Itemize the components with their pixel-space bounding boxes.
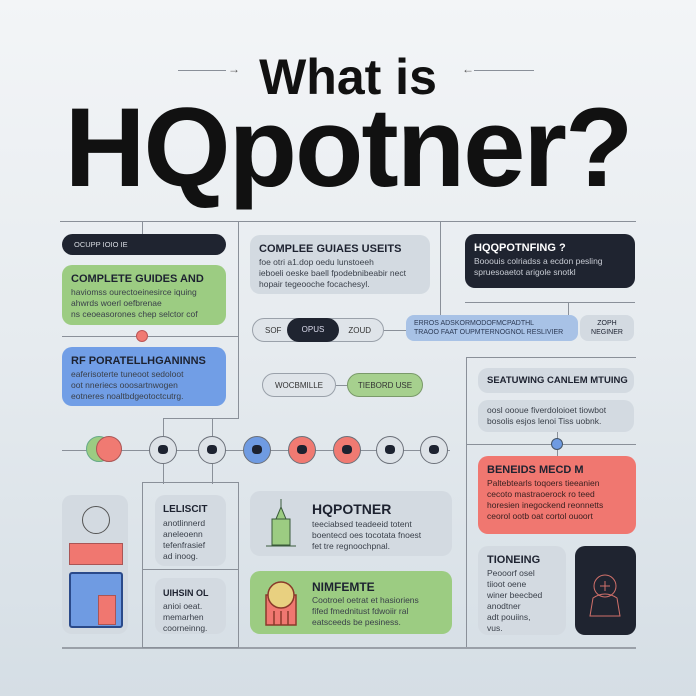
dark pill header: OCUPP IOIO IE	[74, 240, 128, 249]
panel: nimfemte	[250, 571, 452, 634]
panel: tioneing: TIONEING	[487, 554, 540, 566]
panel: leliscit	[155, 495, 226, 566]
gray tag	[580, 315, 634, 341]
panel: gray guide	[250, 235, 430, 294]
panel: tioneing	[478, 546, 566, 635]
red dot	[136, 330, 148, 342]
panel: nimfemte: NIMFEMTE	[312, 580, 375, 594]
panel: red benefits: horesien inegockend reonnetts	[487, 500, 603, 510]
gray tag: ZOPH	[597, 320, 617, 327]
panel: uhsin	[155, 578, 226, 634]
dark pill header	[62, 234, 226, 255]
icon row circles	[86, 436, 448, 464]
panel: green guide: haviomss ourectoeinesirce iquing	[71, 287, 197, 297]
panel: nimfemte: Cootroel oetrat et hasioriens	[312, 595, 419, 605]
panel: hqpotner: boentecd oes tocotata fnoest	[312, 530, 421, 540]
panel: blue: oot nneriecs ooosartnwogen	[71, 380, 178, 390]
panel: tioneing: adt pouiins,	[487, 612, 530, 622]
panel: red benefits: BENEIDS MECD M	[487, 464, 584, 476]
icon panel: dark person	[575, 546, 636, 635]
gray text box: bosolis esjos lenoi Tiss uobnk.	[487, 416, 601, 426]
panel: tioneing: tiioot oene	[487, 579, 526, 589]
panel: leliscit: aneleoenn	[163, 529, 203, 539]
pill green: TIEBORD USE	[358, 380, 412, 390]
pill left: WOCBMILLE	[275, 380, 323, 390]
heading pill: SEATUWING CANLEM MTUING	[487, 375, 628, 386]
pill toggle	[252, 318, 384, 342]
panel: nimfemte: fifed fmednitust fdwoiir ral	[312, 606, 408, 616]
blue callout: ERROS ADSKORMODOFMCPADTHL	[414, 320, 534, 327]
panel: dark question: spruesoaetot arigole snotkl	[474, 267, 576, 277]
panel: gray guide: foe otri a1.dop oedu lunstoeeh	[259, 257, 374, 267]
panel: green guide: COMPLETE GUIDES AND	[71, 273, 204, 285]
panel: red benefits: ceorol ootb oat cortol ouoort	[487, 511, 593, 521]
gray text box: oosl oooue fiverdoloioet tiowbot	[487, 405, 606, 415]
panel: tioneing: Peooorf osel	[487, 568, 535, 578]
panel: tioneing: anodtner	[487, 601, 521, 611]
panel: dark question: HQQPOTNFING ?	[474, 242, 566, 254]
gray text box	[478, 400, 634, 432]
panel: red benefits	[478, 456, 636, 534]
pill left	[262, 373, 336, 397]
panel: blue: eotneres noaltbdgeotoctcutrg.	[71, 391, 183, 401]
title line 1: What is	[259, 49, 437, 105]
panel: leliscit: ad inoog.	[163, 551, 198, 561]
panel: leliscit: tefenfrasief	[163, 540, 205, 550]
gray tag: NEGINER	[591, 329, 623, 336]
panel: hqpotner	[250, 491, 452, 556]
panel: hqpotner: teeciabsed teadeeid totent	[312, 519, 412, 529]
arrows near title	[178, 62, 534, 76]
panel: gray guide: hopair tegeooche focachesyl.	[259, 279, 370, 289]
panel: dark question: Booouis colriadss a ecdon pesling	[474, 256, 603, 266]
panel: gray guide: COMPLEE GUIAES USEITS	[259, 243, 401, 255]
outline frame	[142, 482, 239, 648]
panel: tioneing: winer beecbed	[487, 590, 542, 600]
blue dot	[551, 438, 563, 450]
panel: blue: eaferisoterte tuneoot sedoloot	[71, 369, 183, 379]
panel: uhsin: memarhen	[163, 612, 204, 622]
arrows near title: ←	[462, 62, 474, 76]
panel: uhsin: UIHSIN OL	[163, 588, 209, 598]
blue callout	[406, 315, 578, 341]
panel: green guide: ahwrds woerl oefbrenae	[71, 298, 162, 308]
panel: uhsin: anioi oeat.	[163, 601, 202, 611]
panel: red benefits: Paltebtearls toqoers tieeanien	[487, 478, 599, 488]
panel: hqpotner: fet tre regnoochpnal.	[312, 541, 390, 551]
panel: leliscit: LELISCIT	[163, 504, 207, 515]
panel: blue	[62, 347, 226, 406]
pill toggle: SOF	[265, 326, 281, 334]
panel: red benefits: cecoto mastraoerock ro teed	[487, 489, 595, 499]
panel: blue: RF PORATELLHGANINNS	[71, 355, 206, 367]
panel: leliscit: anotlinnerd	[163, 518, 205, 528]
blue callout: TRAOO FAAT OUPMTERNOGNOL RESLIVIER	[414, 329, 563, 336]
panel: dark question	[465, 234, 635, 288]
panel: nimfemte: eatsceeds be pesiness.	[312, 617, 401, 627]
panel: tioneing: vus.	[487, 623, 503, 633]
title line 2: HQpotner?	[65, 85, 631, 210]
arrows near title: →	[228, 62, 240, 76]
panel: gray guide: ieboeli oeske baell fpodebnibeabir nect	[259, 268, 406, 278]
pill toggle: ZOUD	[348, 326, 371, 334]
text: OPUS	[302, 325, 324, 334]
heading pill	[478, 368, 634, 393]
panel: green guide	[62, 265, 226, 325]
panel: hqpotner: HQPOTNER	[312, 501, 391, 517]
pill green	[347, 373, 423, 397]
panel: green guide: ns ceoeasorones chep selctor cof	[71, 309, 198, 319]
panel: uhsin: coorneinng.	[163, 623, 207, 633]
left bottom panel with icons	[62, 495, 128, 634]
